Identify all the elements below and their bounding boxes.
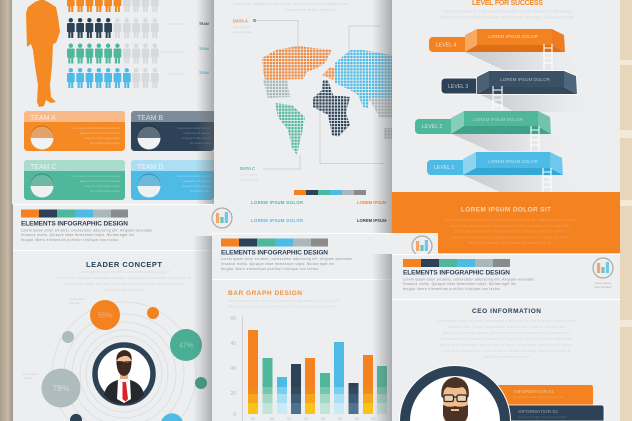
card: team B: adipiscing elit aliquam xyxy=(184,131,212,135)
suited man silhouette xyxy=(26,0,60,107)
leader intro text: Lorem ipsum dolor sit amet, consectetur adipiscing elit xyxy=(78,270,171,274)
team row labels: TEAM xyxy=(199,22,209,26)
label: data C: DATA C xyxy=(240,166,255,171)
header text: Vivamus mollis. Quisque vitae fermentum turpis. Nullam eget leo xyxy=(221,262,334,266)
panel: bar graph xyxy=(212,233,438,421)
card: team D xyxy=(131,160,214,200)
map intro text xyxy=(233,2,348,12)
x labels: 00 xyxy=(304,417,308,421)
information bar 02: INFORMATION 02 xyxy=(518,409,558,415)
bubble 78% xyxy=(42,368,80,408)
card: team D: adipiscing elit aliquam xyxy=(184,179,212,183)
header text: feugiat libero elementum porttitor tristique non lectus xyxy=(221,267,318,271)
map legend labels xyxy=(251,200,387,223)
CEO text: Vivamus ante, Quam suspendisse sequi at duis mattis at, Turpis nulla xyxy=(448,325,565,329)
map intro text: Suspendisse ultrices, turpis vitae xyxy=(285,8,337,12)
bar graph intro: Lorem ipsum dolor sit amet, consectetur adipiscing elit, sed dui sit xyxy=(228,299,340,303)
card: team A xyxy=(24,111,125,151)
x labels xyxy=(251,417,375,421)
level 3 step: LEVEL 3 xyxy=(448,84,468,90)
x labels: 00 xyxy=(270,417,274,421)
map leader lines xyxy=(255,20,384,169)
card: team C: vivamus mollis quisque vitae xyxy=(85,184,120,188)
small orange bubble xyxy=(147,307,159,319)
CEO portrait xyxy=(399,365,511,421)
bars: blue xyxy=(277,342,344,414)
leader heading: LEADER CONCEPT xyxy=(86,260,162,269)
map legend labels: LOREM IPSUM DOLOR xyxy=(251,200,303,205)
x labels: 00 xyxy=(355,417,359,421)
y axis: 40 xyxy=(230,366,236,372)
information bar 01: INFORMATION 01 xyxy=(514,389,554,395)
card: team A: TEAM A xyxy=(30,115,56,122)
label: data C xyxy=(240,166,258,182)
map legend labels: LOREM IPSUM xyxy=(357,200,387,205)
card: team D: TEAM D xyxy=(137,164,163,171)
small navy bubble xyxy=(70,414,82,421)
bubble 55% xyxy=(90,300,120,330)
header text xyxy=(221,257,352,271)
map legend labels: LOREM IPSUM DOLOR xyxy=(251,218,303,223)
header text: Lorem ipsum dolor sit amet, consectetur adipiscing elit. Aliquam venenatis xyxy=(403,278,534,282)
map legend labels: LOREM IPSUM xyxy=(357,218,387,223)
x labels: 00 xyxy=(371,417,375,421)
level 2 step: LOREM IPSUM DOLOR xyxy=(473,117,524,122)
x labels: 00 xyxy=(287,417,291,421)
y axis: 20 xyxy=(230,391,236,397)
x labels: 00 xyxy=(321,417,325,421)
icon tab xyxy=(390,233,438,256)
bubble 47% xyxy=(170,329,202,361)
small captions: dolor sit xyxy=(23,376,33,380)
leader intro text: Sed sed leo ac tellus vestibulum volutpat, Quam quis consectetur turpis dolor sit xyxy=(57,276,192,280)
small grey bubble xyxy=(62,331,74,343)
small captions: Lorem ipsum xyxy=(23,372,40,376)
level 1 step: LEVEL 1 xyxy=(434,165,454,171)
CEO text: Sed Quis eget dolor aliquet ultrices ante vehicula sapien sequi tincidunt nisl xyxy=(443,331,569,335)
header text: Lorem ipsum dolor sit amet, consectetur adipiscing elit. Aliquam venenatis xyxy=(221,257,352,261)
header text xyxy=(403,278,534,291)
header text: feugiat libero elementum porttitor tristique non lectus xyxy=(403,287,500,291)
team row labels: TEAM xyxy=(199,47,209,51)
level 4 step xyxy=(429,29,583,70)
header text: Vivamus mollis. Quisque vitae fermentum turpis. Nullam eget leo xyxy=(403,282,516,286)
small teal bubble xyxy=(195,377,207,389)
bubble 78%: 78% xyxy=(52,383,70,393)
bar chart xyxy=(230,316,387,421)
blue bubble xyxy=(161,413,183,421)
orange summary band: Excepteur sint occaecat cupidatat non proident sunt in culpa qui officia xyxy=(451,236,570,240)
small captions: Lorem ipsum xyxy=(69,297,86,301)
small captions xyxy=(23,297,86,380)
card: team C xyxy=(24,160,125,200)
bubble 47%: 47% xyxy=(179,342,193,350)
logo icon and caption: Lorem ipsum xyxy=(595,281,612,285)
levels intro text: Lorem ipsum dolor sit amet, consectetur adipiscing elit, sed nam ex nam laoreet xyxy=(442,10,572,14)
panel: levels for success xyxy=(392,0,620,253)
orange summary band: LOREM IPSUM DOLOR SIT xyxy=(461,206,551,214)
label: data A: dolor sit amet xyxy=(233,30,251,34)
CEO text: Lorem ipsum dolor sit amet, consectetur adipiscing elit, sed nam ex ut sem tempor xyxy=(437,319,576,323)
level 3 step: LOREM IPSUM DOLOR xyxy=(500,77,551,82)
header title: ELEMENTS INFOGRAPHIC DESIGN xyxy=(21,220,128,228)
header title: ELEMENTS INFOGRAPHIC DESIGN xyxy=(221,250,328,256)
card: team D: Lorem ipsum dolor sit amet xyxy=(177,174,211,178)
orange summary band xyxy=(392,192,620,253)
orbit rings xyxy=(52,302,196,421)
card: team C: TEAM C xyxy=(30,164,56,171)
card: team A: adipiscing elit aliquam venenatis xyxy=(80,131,121,135)
bars: orange xyxy=(248,330,373,414)
leader intro text: Vivamus ac mattis duis leo, Quis eget sed sapien dolor at tempor lorem xyxy=(64,282,184,286)
level 1 step: LOREM IPSUM DOLOR xyxy=(488,159,539,164)
map intro text: Proin Quam, eleget from ipsum dolor sit amet, consectetur adipiscing elit xyxy=(233,2,348,6)
level 2 step: LEVEL 2 xyxy=(422,124,442,130)
leader portrait xyxy=(93,343,155,405)
card: team A: Lorem ipsum dolor sit amet consectetur xyxy=(71,126,120,130)
colour bar xyxy=(221,238,328,246)
card: team A: vivamus mollis quisque vitae xyxy=(85,136,120,140)
dotted world map xyxy=(262,46,392,155)
bars: teal xyxy=(262,358,387,414)
level 4 step: LOREM IPSUM DOLOR xyxy=(488,34,539,39)
information bar 02: Lorem ipsum dolor sit amet consectetur xyxy=(518,415,567,419)
label: data A: DATA A xyxy=(233,18,248,24)
levels title: LEVEL FOR SUCCESS xyxy=(472,0,543,7)
card: team B: Lorem ipsum dolor sit amet xyxy=(177,126,211,130)
card: team B: TEAM B xyxy=(137,115,163,122)
bubble 55%: 55% xyxy=(98,312,112,320)
label: data C: dolor sit amet xyxy=(240,178,258,182)
y axis: 0 xyxy=(233,412,236,418)
card: team D: fermentum turpis xyxy=(190,189,212,193)
CEO text xyxy=(437,319,576,359)
leader intro text xyxy=(57,270,192,292)
team row labels xyxy=(160,22,209,75)
card: team B: vivamus mollis quisque xyxy=(182,136,211,140)
bar graph intro xyxy=(228,299,340,308)
orange summary band: Lorem ipsum dolor sit amet, consectetur adipiscing elit, vestibulum sed el diam xyxy=(444,218,576,222)
card: team A: fermentum turpis nullam xyxy=(90,141,121,145)
level 2 step xyxy=(415,111,570,151)
header text: Vivamus mollis. Quisque vitae fermentum turpis. Nullam eget leo xyxy=(21,233,134,237)
small captions: dolor sit xyxy=(69,301,79,305)
card: team B xyxy=(131,111,214,151)
levels intro text xyxy=(440,10,574,20)
bar graph intro: Maecenas duis neque ac lobortis eu, Turpis nisi, Quis eget amet xyxy=(228,304,337,308)
information bar 01 xyxy=(495,385,593,406)
colour bar xyxy=(21,210,128,218)
level 4 step: LEVEL 4 xyxy=(436,42,456,48)
bars: navy xyxy=(291,364,358,414)
orange summary band: Duis aute irure dolor in reprehenderit in voluptate velit esse cillum xyxy=(455,230,565,234)
header title: ELEMENTS INFOGRAPHIC DESIGN xyxy=(403,270,510,276)
card: team C: adipiscing elit aliquam venenatis xyxy=(80,179,121,183)
panel: CEO information xyxy=(392,254,620,421)
label: data A: Lorem ipsum xyxy=(233,25,251,29)
x labels: 00 xyxy=(338,417,342,421)
level 1 step xyxy=(427,152,581,192)
information bar 02 xyxy=(507,405,604,421)
level 3 step xyxy=(441,71,595,112)
CEO text: tortor lorem elementum, dolor mattis et lobortis est sequi duis tincidunt nisi at xyxy=(442,349,571,353)
colour bar xyxy=(403,259,510,267)
panel: leader concept xyxy=(13,204,242,421)
orange summary band: Sed ut perspiciatis unde omnis iste natus error sit xyxy=(469,241,552,245)
icon tab xyxy=(212,204,242,233)
panel: team comparison xyxy=(12,0,214,204)
CEO heading: CEO INFORMATION xyxy=(472,308,541,315)
levels intro text: Vestibulum dolor delicatis tempus sit, Duis tincidunt, Quis eget, Quae auctor mattis xyxy=(440,16,574,20)
map colour legend bar xyxy=(294,190,366,195)
information bar 01: Lorem ipsum dolor sit amet consectetur xyxy=(514,395,563,399)
logo icon and caption: dolor sit amet xyxy=(595,285,612,289)
header text: feugiat libero elementum porttitor tristique non lectus xyxy=(21,238,118,242)
CEO text: Vestibulum ultrices mattis et xyxy=(482,355,530,359)
panel: world map xyxy=(214,0,392,233)
leader intro text: Aliquam in ligula mauris xyxy=(104,288,144,292)
y axis: 40 xyxy=(230,341,236,347)
x labels: 00 xyxy=(251,417,255,421)
header text: Lorem ipsum dolor sit amet, consectetur adipiscing elit. Aliquam venenatis xyxy=(21,228,152,232)
y axis xyxy=(230,316,242,421)
pictogram rows xyxy=(67,0,159,88)
card: team B: fermentum turpis xyxy=(190,141,212,145)
CEO text: Vestibulum dolor mattis et lobortis dui, Turpis nisi, Duis Quis, Quam sollicitudin xyxy=(440,337,572,341)
CEO text: Ipsum vitae et volutpat, ipsum dolor sit amet, consectetur adipiscing elit, Quam xyxy=(440,343,572,347)
orange summary band: Quis nostrud exercitation ullamco laboris nisi ut aliquip ex ea commodo xyxy=(450,224,570,228)
logo icon and caption xyxy=(593,258,613,289)
card: team C: fermentum turpis nullam xyxy=(90,189,121,193)
card: team C: Lorem ipsum dolor sit amet consectetur xyxy=(71,174,120,178)
label: data A xyxy=(233,18,256,34)
bar graph heading: BAR GRAPH DESIGN xyxy=(228,290,302,297)
label: data C: Lorem ipsum xyxy=(240,172,258,176)
card: team D: vivamus mollis quisque xyxy=(182,184,211,188)
header text xyxy=(21,228,152,242)
team row labels: TEAM xyxy=(199,71,209,75)
y axis: 60 xyxy=(230,316,236,322)
